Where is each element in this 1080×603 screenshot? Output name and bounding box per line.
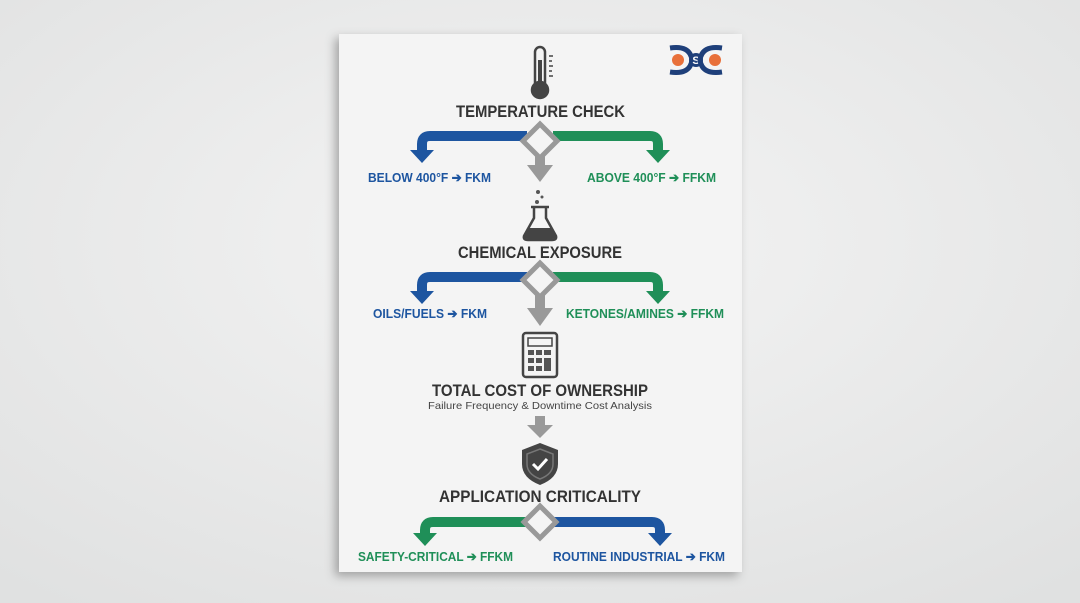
branch: chemical: OILS/FUELS ➔ FKM — [373, 306, 487, 321]
icon: calculator — [523, 333, 557, 377]
icon: thermometer — [532, 47, 553, 98]
icon: flask — [524, 190, 556, 240]
heading: total cost: TOTAL COST OF OWNERSHIP — [432, 381, 648, 400]
branch: chemical — [373, 263, 724, 326]
branch: criticality: SAFETY-CRITICAL ➔ FFKM — [358, 549, 513, 564]
branch: temperature — [368, 124, 716, 185]
logo — [670, 48, 722, 72]
heading: chemical exposure: CHEMICAL EXPOSURE — [458, 243, 622, 262]
logo: S — [692, 55, 700, 67]
branch: temperature: BELOW 400°F ➔ FKM — [368, 170, 491, 185]
branch: criticality — [358, 506, 725, 564]
heading: temperature check: TEMPERATURE CHECK — [456, 102, 626, 121]
branch: temperature: ABOVE 400°F ➔ FFKM — [587, 170, 716, 185]
arrow: down — [527, 416, 553, 438]
heading: application criticality: APPLICATION CRITICALITY — [439, 487, 642, 506]
icon: shield — [522, 443, 558, 485]
subtitle: Failure Frequency & Downtime Cost Analysis — [428, 400, 652, 412]
poster — [339, 34, 742, 572]
branch: criticality: ROUTINE INDUSTRIAL ➔ FKM — [553, 549, 725, 564]
branch: chemical: KETONES/AMINES ➔ FFKM — [566, 306, 724, 321]
